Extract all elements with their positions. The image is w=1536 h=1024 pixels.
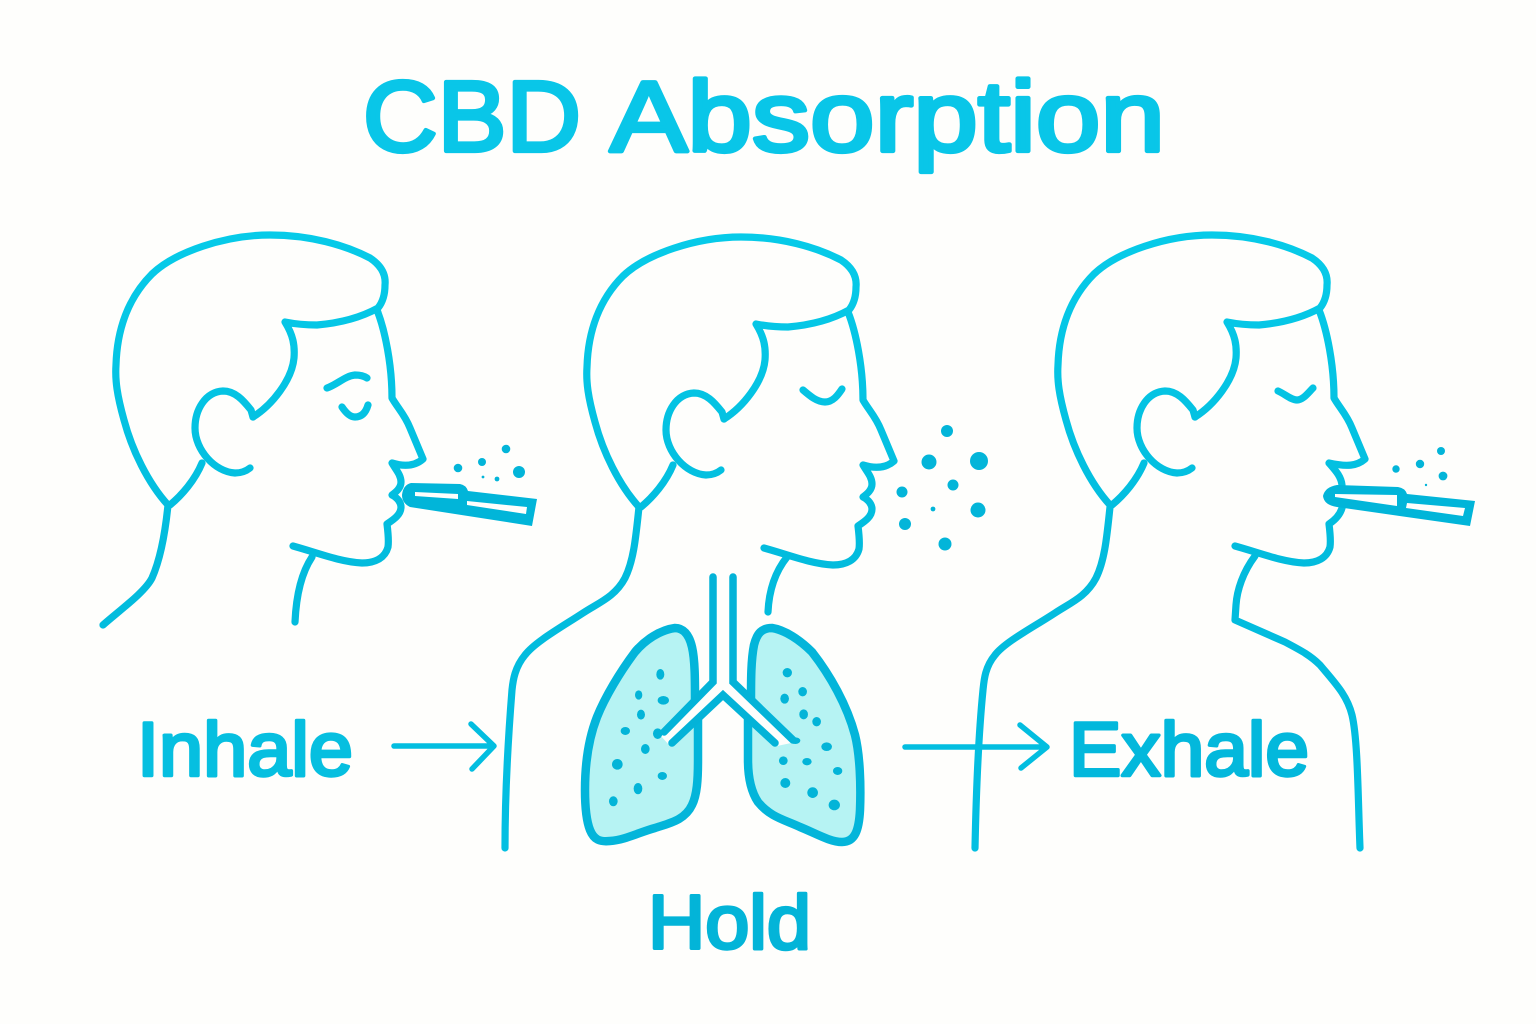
vape device: [1323, 485, 1475, 526]
lungs: [585, 575, 860, 842]
hair and head outline: [1058, 235, 1327, 505]
ear: [666, 393, 724, 475]
head: [1058, 235, 1365, 563]
figure: inhale: [103, 235, 537, 625]
arrow: hold to exhale: [905, 725, 1047, 768]
label: Hold: Hold: [648, 880, 811, 966]
label: Inhale: Inhale: [137, 708, 353, 792]
label: Exhale: Exhale: [1069, 708, 1309, 792]
eyebrow and closed eye: [327, 375, 368, 417]
vapor particles: [454, 445, 525, 481]
trachea and bronchi: [664, 577, 793, 743]
vapor particles: [896, 425, 988, 550]
closed eye: [1278, 388, 1313, 400]
lung particles: [609, 668, 842, 810]
face profile: [293, 310, 423, 622]
arrow: inhale to hold: [394, 724, 494, 769]
hair and head outline: [103, 235, 385, 625]
figure: exhale: [975, 235, 1475, 848]
vape device: [402, 483, 537, 526]
torso outline: [975, 507, 1360, 848]
figure: hold: [505, 237, 988, 848]
title: Absorption: [610, 61, 1165, 173]
title: [363, 61, 1165, 173]
ear: [1137, 391, 1195, 473]
torso outline: [505, 507, 787, 848]
hair and head outline: [587, 237, 856, 507]
closed eye: [803, 389, 842, 402]
face profile: [764, 312, 894, 565]
left lung: [585, 628, 698, 841]
right lung: [748, 628, 860, 842]
face profile: [1235, 310, 1365, 563]
ear: [195, 391, 253, 473]
vapor particles: [1392, 447, 1447, 486]
head: [587, 237, 894, 565]
bronchi corridor: [660, 575, 796, 746]
title: CBD: [363, 61, 581, 173]
